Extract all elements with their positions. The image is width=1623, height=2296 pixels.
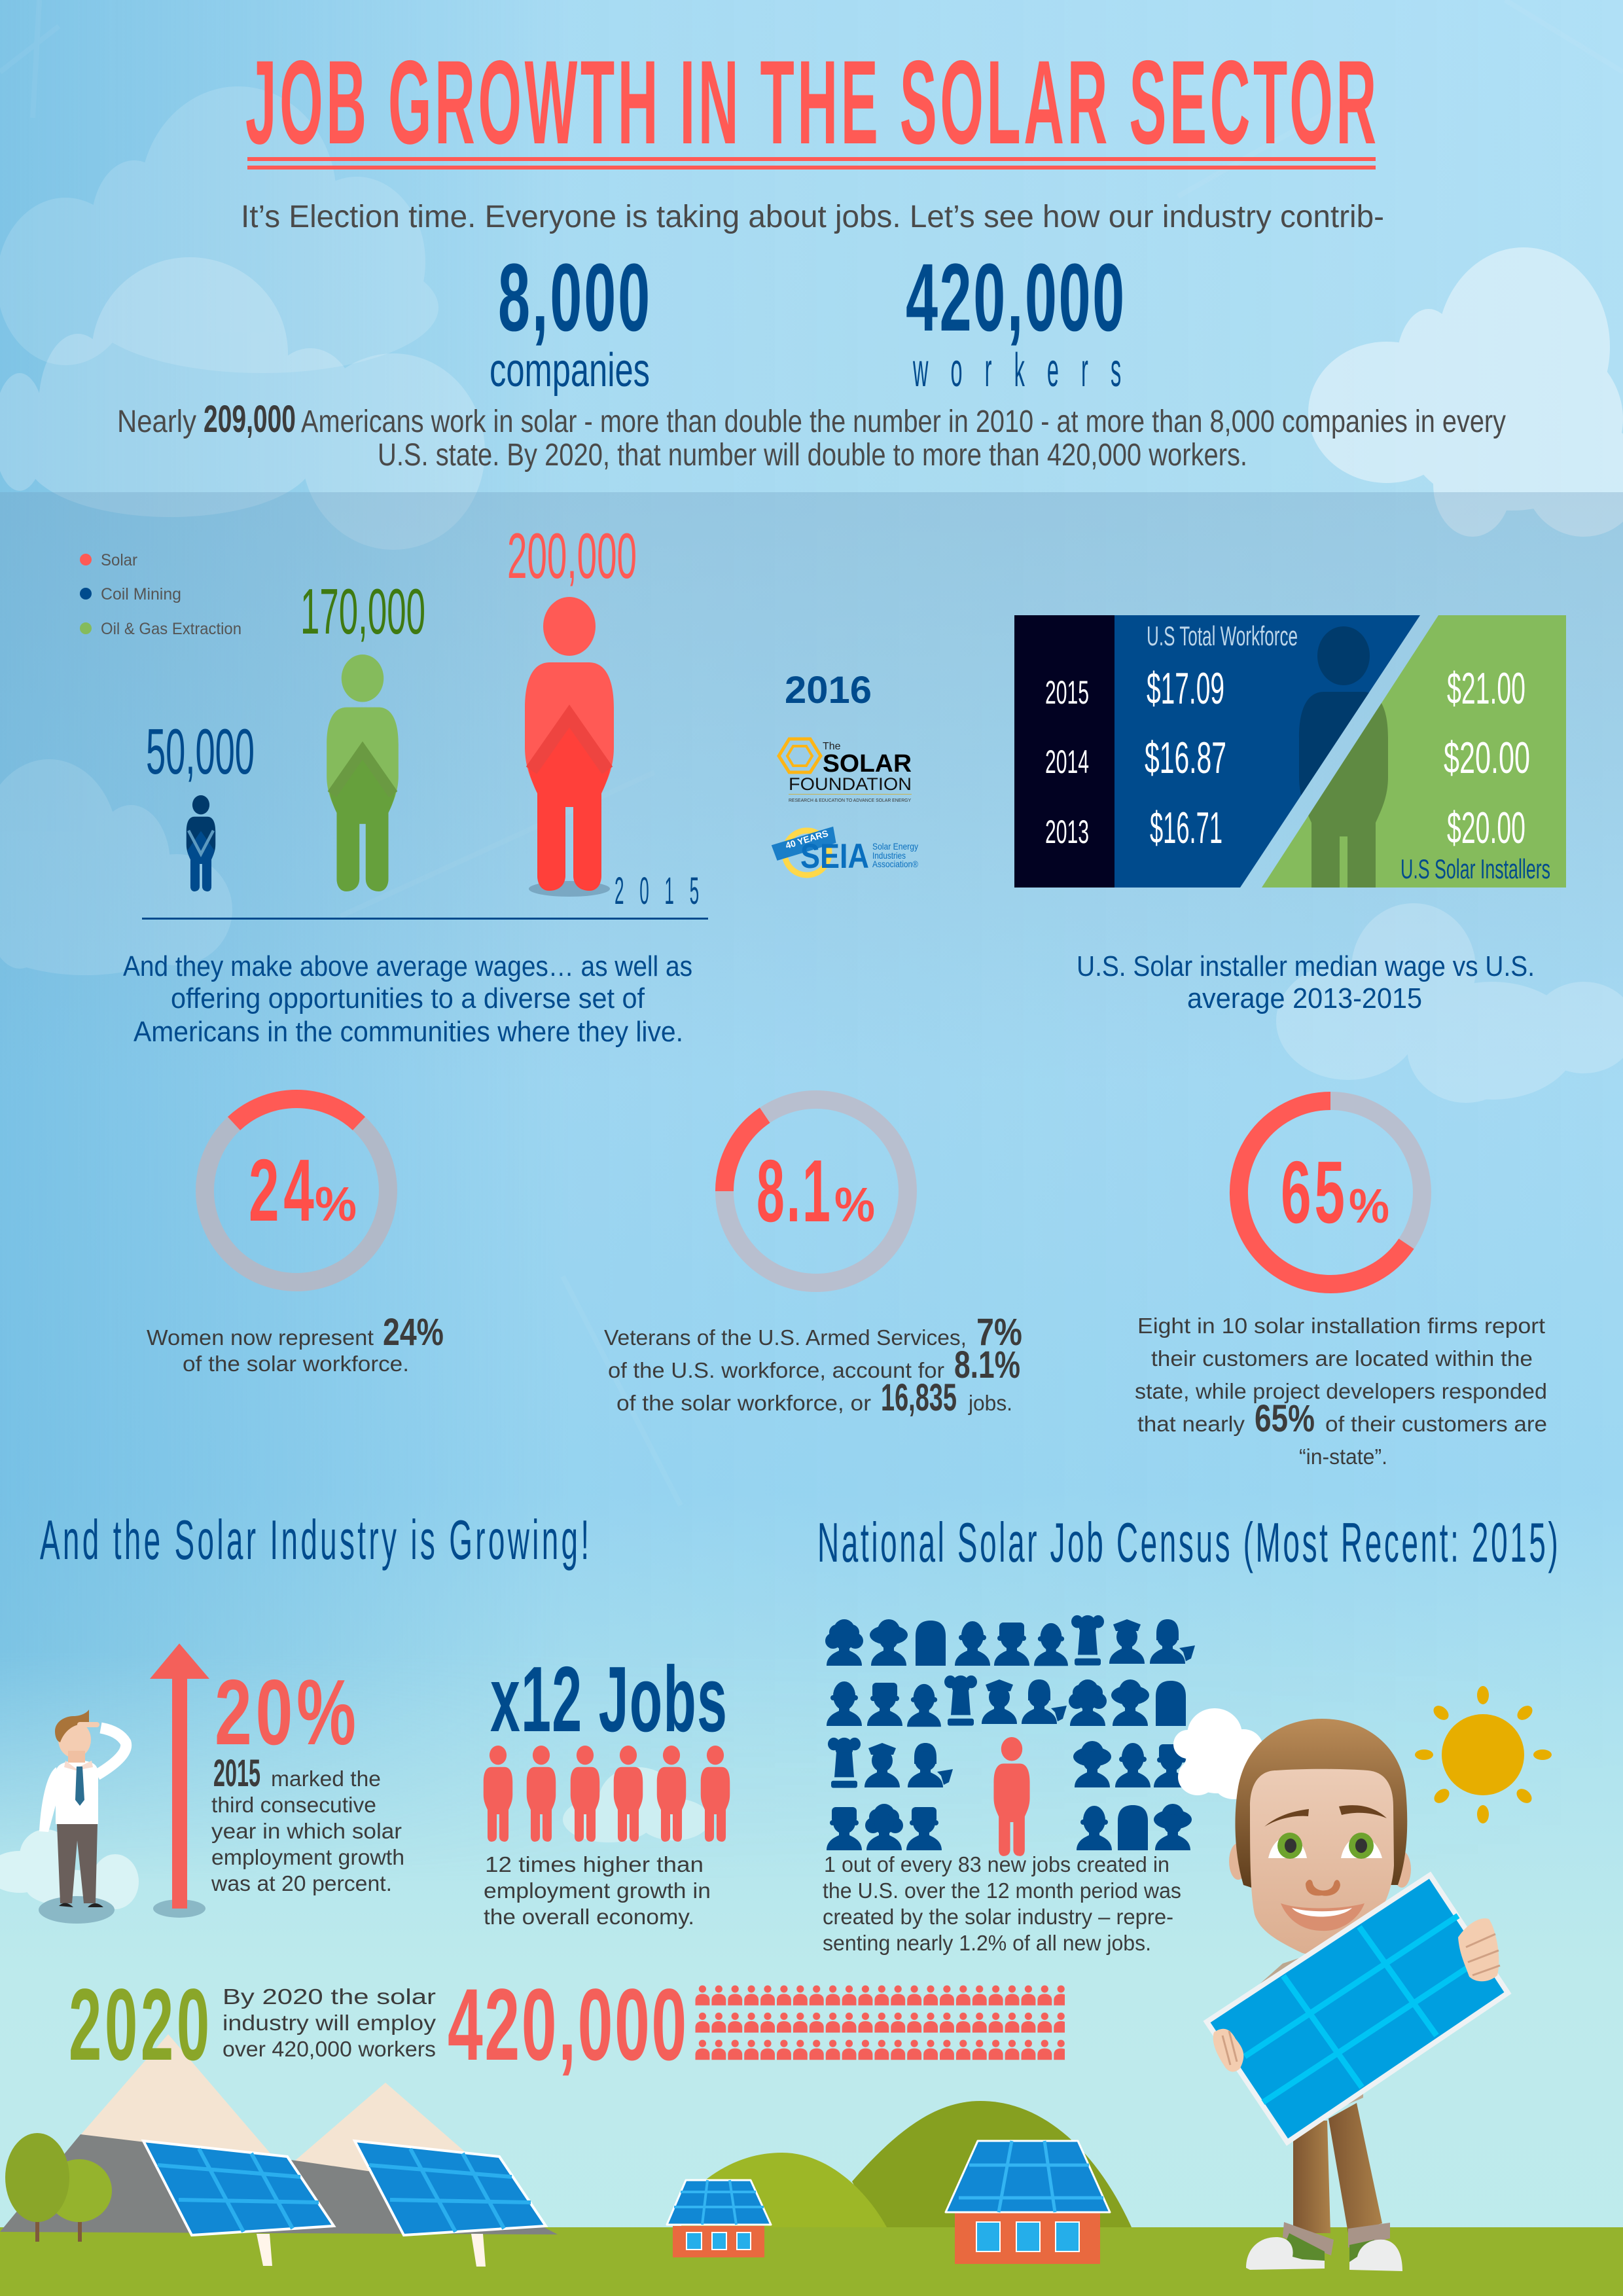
heading: industry growing: And the Solar Industry is Growing! [40, 1509, 589, 1571]
stat: 20%: 2015 [213, 1752, 260, 1795]
text: 1 out of 83: senting nearly 1.2% of all new jobs. [823, 1931, 1151, 1955]
text: 1 out of 83: created by the solar industry – repre- [823, 1905, 1173, 1929]
logo: SEIA: Association® [872, 859, 919, 869]
mouth [1281, 1903, 1364, 1931]
logo: SEIA: Solar Energy [872, 841, 918, 852]
logo: The Solar Foundation [779, 739, 912, 803]
donut: 24% women: % [315, 1177, 357, 1231]
wage labels: $16.71 [1150, 803, 1222, 853]
trees [5, 2133, 112, 2242]
hills [681, 2101, 1132, 2227]
stat: 20%: year in which solar [211, 1819, 402, 1843]
wage labels: $20.00 [1447, 803, 1525, 853]
stat: 8,000 companies: 8,000 [498, 243, 650, 351]
clouds mid right [1276, 903, 1623, 1103]
caption: median wage: average 2013-2015 [1187, 982, 1422, 1014]
wage labels: 2013 [1045, 814, 1089, 850]
stat: 2020 forecast [69, 1967, 1065, 2082]
text: women stat: 24% [383, 1311, 444, 1354]
donut: 8.1% veterans: 8.1 [757, 1143, 830, 1240]
stat: 2020 forecast: By 2020 the solar [223, 1984, 436, 2009]
legend: Oil & Gas Extraction [101, 620, 241, 638]
stat: x12 jobs: employment growth in [484, 1878, 711, 1903]
logo: SEIA: Industries [872, 850, 906, 861]
pictogram: job census silhouettes [825, 1615, 1195, 1856]
stat: 420,000 workers: workers [912, 343, 1121, 396]
wage labels: U.S Total Workforce [1147, 620, 1298, 651]
stat: 2020 forecast: 420,000 [448, 1967, 687, 2082]
six people row [484, 1746, 730, 1842]
text: women stat [147, 1311, 444, 1376]
text: in-state stat: “in-state”. [1299, 1444, 1387, 1469]
workforce silhouette [1299, 626, 1388, 888]
wage labels: $21.00 [1447, 664, 1525, 713]
text: 1 out of 83 [823, 1852, 1181, 1955]
text: in-state stat: state, while project developers responded [1135, 1379, 1547, 1403]
landscape [0, 2034, 1623, 2296]
stat: 20%: employment growth [211, 1845, 404, 1869]
stat: x12 jobs [484, 1647, 730, 1929]
donut: 24% women: 24 [249, 1140, 314, 1240]
paragraph: workforce summary [117, 398, 1506, 473]
legs [1246, 2103, 1402, 2271]
paragraph: workforce summary: Nearly [117, 404, 196, 439]
solar panel 2 [355, 2141, 546, 2267]
stat: 20%: 20% [215, 1661, 356, 1765]
intro text: It’s Election time. Everyone is taking about jobs. Let’s see how our industry contrib- [241, 200, 1384, 234]
mountains [0, 2034, 558, 2234]
nose [1306, 1880, 1340, 1896]
panel: wage comparison [1014, 615, 1566, 888]
paragraph: workforce summary: 209,000 [204, 398, 296, 440]
text: in-state stat: Eight in 10 solar installation firms report [1137, 1314, 1545, 1338]
stat: x12 jobs: x12 Jobs [490, 1647, 727, 1751]
wage labels: 2014 [1045, 744, 1089, 780]
donut: 8.1% veterans [724, 1100, 908, 1283]
text: 1 out of 83: 1 out of every 83 new jobs created in [824, 1852, 1169, 1876]
head [1229, 1719, 1411, 1954]
wage labels: $16.87 [1145, 733, 1226, 783]
wage labels: 2015 [1045, 674, 1089, 711]
clouds mid left [0, 759, 232, 975]
caption: above average wages: offering opportunities to a diverse set of [171, 982, 645, 1014]
donut: 65% in-state: 65 [1281, 1142, 1345, 1242]
stat: 2020 forecast: 2020 [69, 1969, 209, 2082]
donut: 65% in-state: % [1349, 1179, 1389, 1233]
logo: The Solar Foundation: SOLAR [823, 750, 912, 778]
stat: 8,000 companies [490, 243, 650, 397]
caption: median wage: U.S. Solar installer median wage vs U.S. [1077, 950, 1535, 982]
clouds top left [0, 86, 438, 373]
white cloud behind character [1173, 1708, 1263, 1799]
text: veterans stat: 16,835 [881, 1376, 957, 1419]
text: in-state stat: that nearly [1137, 1412, 1245, 1436]
sun [1415, 1686, 1552, 1823]
solar figure: 200,000 [507, 520, 637, 592]
caption: above average wages: Americans in the communities where they live. [134, 1016, 683, 1048]
stat: x12 jobs: the overall economy. [484, 1905, 694, 1929]
text: veterans stat: of the U.S. workforce, account for [608, 1358, 944, 1382]
small house [667, 2180, 771, 2257]
text: veterans stat [604, 1311, 1022, 1419]
arrow up [150, 1643, 209, 1918]
caption: above average wages [123, 950, 692, 1048]
clouds lower left [0, 257, 485, 550]
text: veterans stat: 8.1% [954, 1344, 1020, 1386]
oil and gas figure: 170,000 [300, 575, 425, 647]
wage labels: $20.00 [1444, 733, 1530, 783]
crowd pictogram [694, 1985, 1065, 2060]
donut: 65% in-state [1239, 1101, 1422, 1284]
stat: 8,000 companies: companies [490, 344, 650, 397]
logo: The Solar Foundation: RESEARCH & EDUCATION TO ADVANCE SOLAR ENERGY [789, 798, 911, 803]
caption: above average wages: And they make above average wages… as well as [123, 950, 692, 982]
caption: median wage [1077, 950, 1535, 1014]
hands [1213, 1918, 1500, 2072]
legend [80, 551, 241, 638]
stat: 20% [211, 1661, 404, 1895]
text: veterans stat: jobs. [968, 1391, 1012, 1415]
stat: 20%: third consecutive [211, 1793, 376, 1817]
text: women stat: of the solar workforce. [183, 1352, 409, 1376]
text: in-state stat: of their customers are [1325, 1412, 1547, 1436]
title: JOB GROWTH IN THE SOLAR SECTOR [245, 36, 1376, 170]
year label: 2015 [615, 869, 699, 912]
ground [0, 2227, 1623, 2296]
donut: 24% women [205, 1099, 388, 1282]
text: in-state stat: their customers are located within the [1151, 1346, 1533, 1371]
coal mining figure: 50,000 [146, 715, 255, 787]
stat: 20%: was at 20 percent. [211, 1871, 392, 1895]
stat: 2020 forecast: over 420,000 workers [223, 2037, 436, 2061]
solar panel 1 [143, 2141, 334, 2266]
solar panel held [1207, 1875, 1508, 2142]
clouds right [1308, 247, 1623, 537]
logo: The Solar Foundation: The [823, 741, 841, 752]
text: 1 out of 83: the U.S. over the 12 month period was [823, 1878, 1181, 1903]
text: women stat: Women now represent [147, 1325, 374, 1350]
people chart: jobs by sector 2015 [142, 520, 708, 920]
logo: SEIA: 40 YEARS [784, 828, 829, 851]
darker band [0, 492, 1623, 1081]
text: veterans stat: Veterans of the U.S. Armed Services, [604, 1325, 967, 1350]
wage labels [1045, 620, 1550, 884]
stat: x12 jobs: 12 times higher than [485, 1852, 704, 1876]
solar figure [507, 520, 637, 897]
stat: 2020 forecast: industry will employ [223, 2011, 437, 2035]
text: veterans stat: of the solar workforce, or [616, 1391, 871, 1415]
text: in-state stat [1135, 1314, 1547, 1469]
logo: SEIA [775, 828, 919, 876]
paragraph: workforce summary: U.S. state. By 2020, that number will double to more than 420,000 workers. [378, 438, 1247, 473]
legend: Coil Mining [101, 585, 181, 603]
stat: 20%: marked the [271, 1767, 381, 1791]
eyes [1264, 1805, 1387, 1859]
coal mining figure [146, 715, 255, 891]
large house [946, 2141, 1110, 2264]
legend: Solar [101, 551, 137, 569]
logo: The Solar Foundation: FOUNDATION [789, 774, 912, 794]
red person: 1 in 83 [993, 1737, 1030, 1856]
character holding solar panel [1207, 1719, 1508, 2271]
illustration: man looking up [0, 1710, 139, 1924]
logo: SEIA: SEIA [800, 837, 869, 876]
wage labels: $17.09 [1147, 664, 1224, 713]
text: in-state stat: 65% [1255, 1397, 1315, 1440]
text: veterans stat: 7% [976, 1311, 1022, 1354]
year 2016: 2016 [785, 669, 872, 711]
oil and gas figure [300, 575, 425, 891]
stat: 420,000 workers: 420,000 [906, 243, 1124, 351]
donut: 8.1% veterans: % [834, 1177, 875, 1232]
heading: job census: National Solar Job Census (Most Recent: 2015) [817, 1512, 1558, 1574]
shirt collar [1253, 1957, 1363, 2114]
